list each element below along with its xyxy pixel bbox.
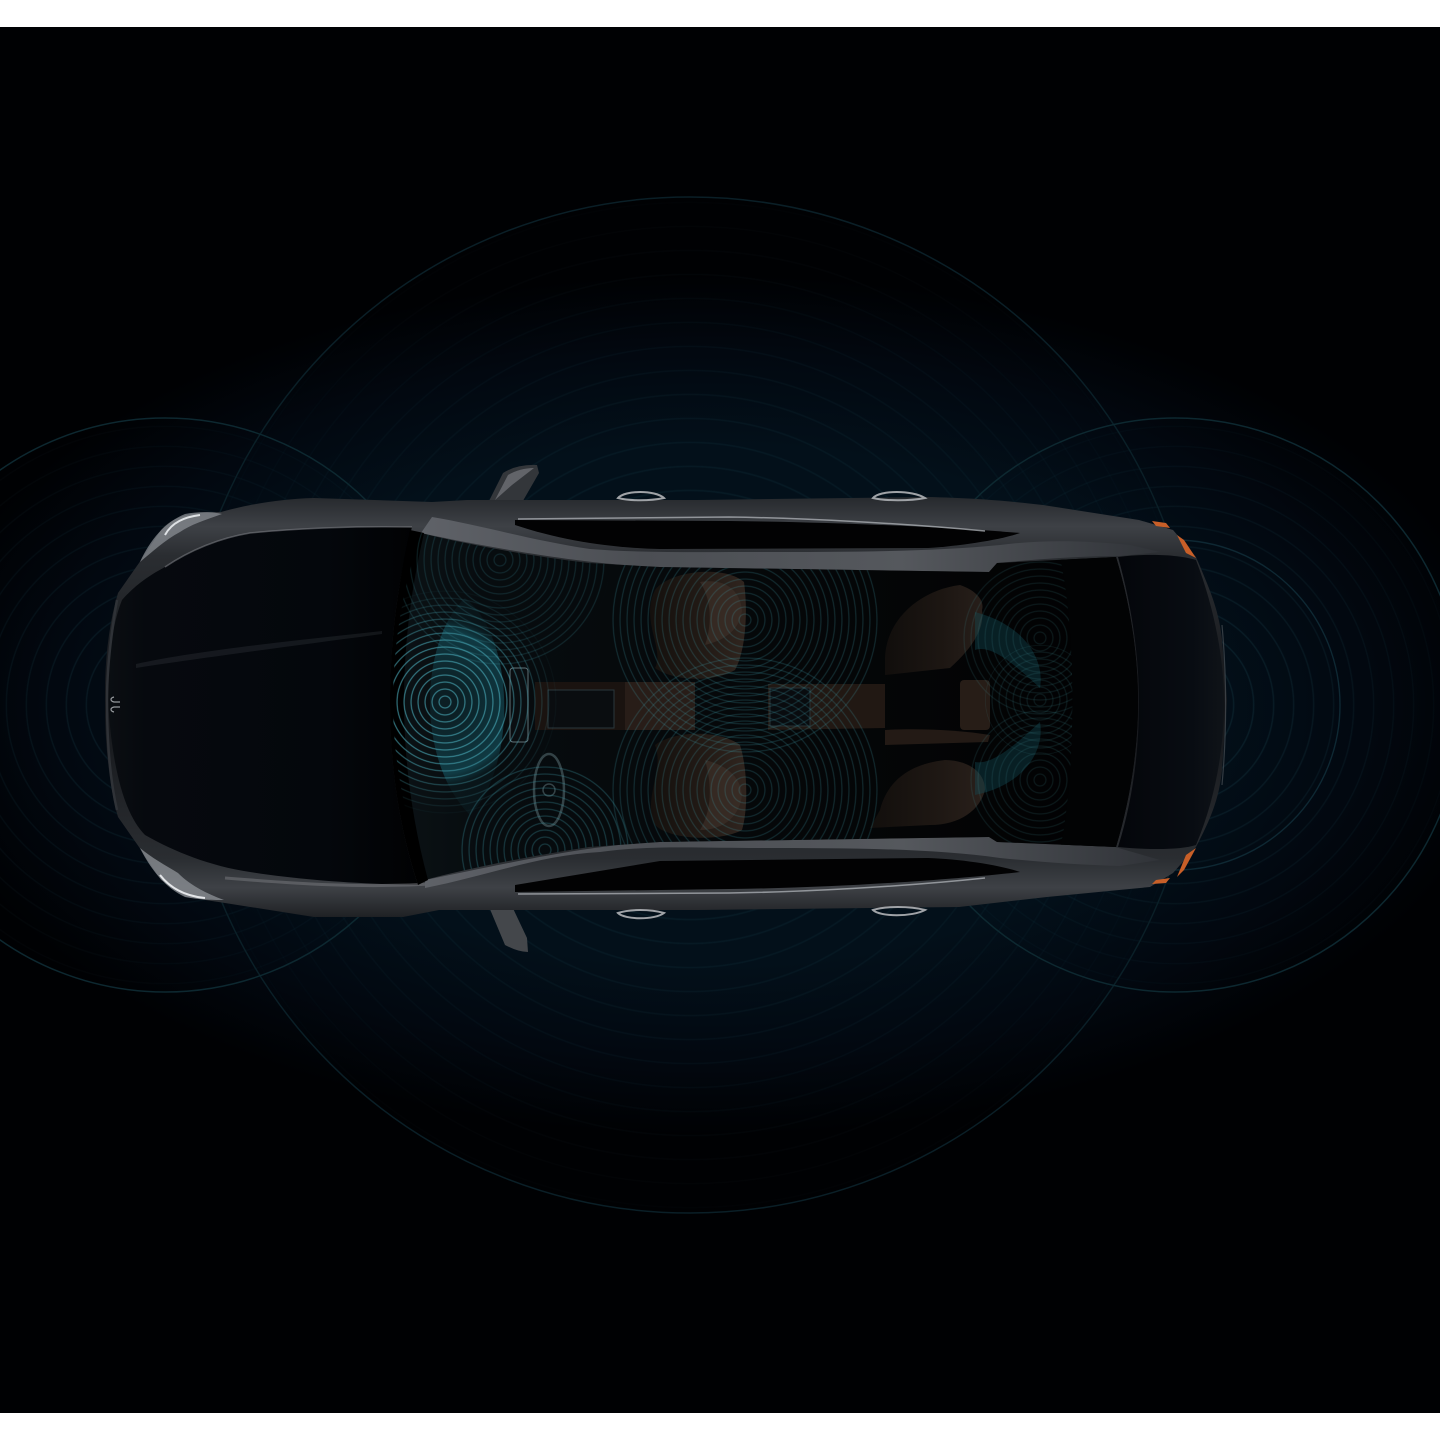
roof rail top (421, 517, 1160, 572)
sound wave rings around the car (0, 195, 1440, 1215)
trunk edge line (1222, 625, 1226, 785)
roof glass (393, 533, 1138, 880)
icon: door handles (618, 492, 925, 918)
front seat top headrest highlight (700, 581, 742, 645)
icon: headlight top (140, 512, 222, 562)
front rim (107, 600, 117, 810)
interference pattern door speakers (390, 450, 880, 935)
icon: tail lights (1152, 521, 1196, 884)
front console wood inlay (625, 682, 695, 730)
icon: side mirror bottom (487, 902, 528, 952)
car (105, 450, 1227, 952)
front seat bottom headrest highlight (700, 760, 742, 830)
cyan sound lobe front (430, 598, 504, 815)
icon: grille badge (111, 697, 120, 712)
hood lower edge highlight (225, 878, 432, 886)
hood highlight streak (136, 631, 382, 668)
gear panel (548, 690, 614, 728)
interference pattern front (393, 591, 556, 813)
interference pattern rear (964, 562, 1072, 842)
window trim top (518, 517, 985, 531)
rear seat top (885, 585, 983, 675)
hood (108, 527, 418, 885)
window trim bottom (518, 878, 985, 894)
rear console (768, 684, 885, 730)
rear bench strip (885, 729, 990, 745)
steering wheel (534, 754, 564, 826)
side window bottom (515, 858, 1020, 892)
trunk lid (1118, 555, 1224, 849)
black A-pillar band (390, 530, 428, 885)
front seat bottom (651, 734, 746, 838)
car body silhouette (105, 497, 1227, 917)
side window top (515, 520, 1020, 549)
center stack (510, 668, 528, 742)
rear armrest (960, 680, 990, 730)
rear seat bottom (870, 760, 985, 828)
icon: headlight bright bottom (160, 875, 205, 898)
interior visible through glass (330, 450, 1140, 935)
front seat top (650, 572, 746, 679)
icon: headlight bright top (165, 515, 200, 535)
roof rail bottom (425, 837, 1160, 888)
hood edge highlight (165, 527, 412, 567)
rear window dark shelf (1060, 557, 1140, 850)
cyan sound lobes rear (975, 612, 1041, 795)
front console (535, 682, 625, 730)
icon: side mirror top (487, 465, 539, 506)
mirror highlight top (495, 468, 534, 500)
icon: headlight bottom (140, 848, 224, 900)
rear console panel (770, 688, 810, 726)
